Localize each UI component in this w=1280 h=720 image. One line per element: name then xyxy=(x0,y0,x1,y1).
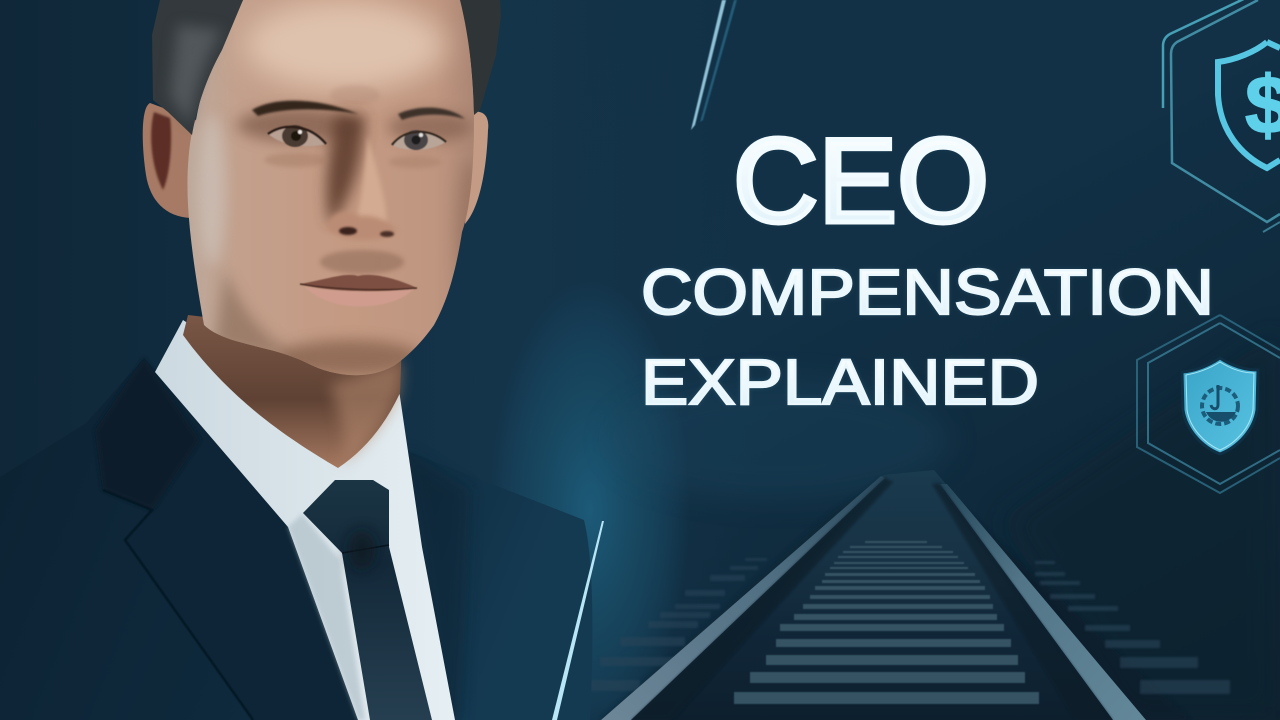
title glow xyxy=(641,114,1214,418)
icon: dollar shield in hexagon xyxy=(1163,0,1280,232)
left eyebrow xyxy=(252,101,358,116)
left side sleepers xyxy=(590,558,767,691)
philtrum shadow xyxy=(320,250,404,274)
heading: COMPENSATION: COMPENSATION xyxy=(641,256,1214,328)
heading: EXPLAINED: EXPLAINED xyxy=(641,346,1039,418)
tie xyxy=(303,480,432,720)
icon: emblem shield in hexagon xyxy=(1137,315,1280,493)
right lapel shading xyxy=(405,450,470,720)
right cheek shadow xyxy=(454,164,472,264)
lower light streak xyxy=(552,521,604,720)
left eye xyxy=(268,125,326,147)
neck xyxy=(183,315,402,468)
mouth xyxy=(300,275,417,306)
track bed xyxy=(601,470,1146,720)
centre sleepers xyxy=(734,541,1039,704)
suit jacket xyxy=(0,358,592,720)
title glow: EXPLAINED xyxy=(641,346,1039,418)
left lapel xyxy=(95,358,358,720)
collar dark leaf xyxy=(95,358,200,510)
portrait: man in suit xyxy=(92,0,592,720)
hair xyxy=(152,0,243,135)
left ear xyxy=(143,103,196,218)
top light streaks xyxy=(691,0,737,130)
right side sleepers xyxy=(1035,561,1230,694)
title glow: COMPENSATION xyxy=(641,256,1214,328)
nose tip xyxy=(327,212,397,240)
forehead highlight xyxy=(245,0,445,90)
right eyebrow xyxy=(398,108,465,120)
right rail xyxy=(940,484,1146,720)
nose light xyxy=(358,140,386,220)
left rail xyxy=(601,476,885,720)
chin and jaw shadow xyxy=(278,340,422,376)
eye socket shadow xyxy=(237,108,357,142)
gravel shoulders xyxy=(600,478,885,720)
forehead wrinkle shading xyxy=(332,86,378,102)
left face edge light xyxy=(198,115,226,265)
white shirt xyxy=(155,320,455,720)
collar shadow xyxy=(288,514,365,720)
title xyxy=(641,114,1214,418)
nose side shadow xyxy=(327,115,365,225)
right eye xyxy=(392,130,446,150)
under-eye shading xyxy=(265,153,322,167)
right ear xyxy=(465,112,488,224)
title glow: CEO xyxy=(733,114,989,248)
heading: CEO: CEO xyxy=(733,114,989,248)
face xyxy=(180,0,484,390)
railway tracks xyxy=(590,470,1230,720)
